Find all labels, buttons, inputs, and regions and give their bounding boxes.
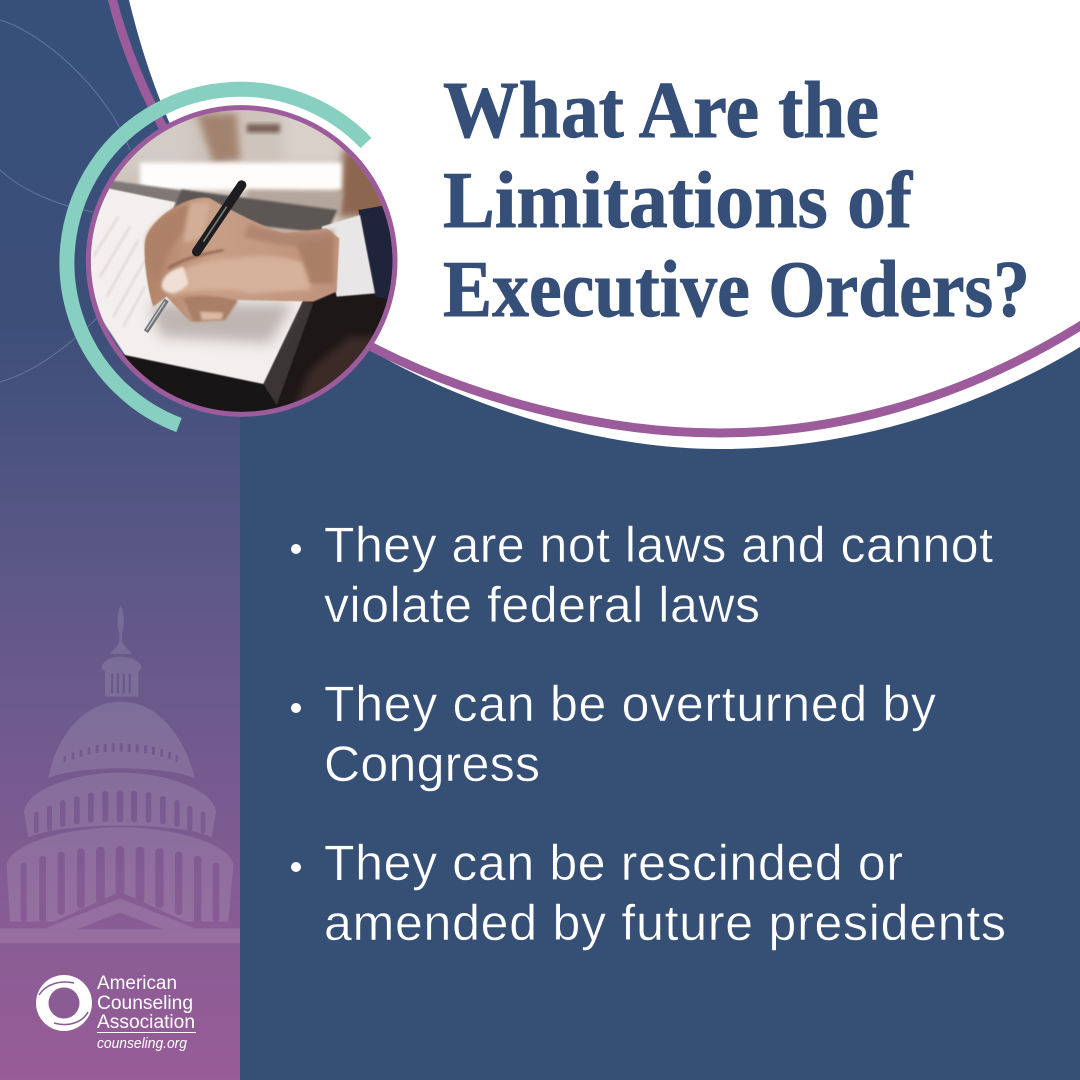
black folder base — [122, 354, 257, 412]
logo wordmark — [97, 973, 195, 1033]
capitol building watermark — [0, 590, 240, 960]
logo ring icon — [36, 975, 92, 1031]
bullet list — [291, 517, 1006, 951]
bullet 2: They can be overturned by — [324, 676, 936, 732]
logo url: counseling.org — [97, 1036, 187, 1052]
decorative thin arcs — [0, 20, 130, 382]
folder — [170, 189, 337, 233]
panel: left gradient column — [0, 0, 240, 1080]
photo blurred background — [90, 110, 386, 263]
logo: American Counseling Association — [36, 973, 196, 1052]
bullet 1: violate federal laws — [324, 577, 760, 633]
dark desk lower right — [265, 286, 390, 407]
logo wordmark: American — [97, 973, 177, 994]
title: Executive Orders? — [443, 246, 1030, 334]
bullet 1: They are not laws and cannot — [324, 517, 993, 573]
bullet 2 — [291, 676, 936, 792]
photo: hand signing document — [83, 103, 403, 423]
photo purple ring — [88, 108, 395, 414]
paper — [83, 188, 303, 384]
logo wordmark: Association — [97, 1012, 195, 1033]
logo wordmark: Counseling — [97, 993, 193, 1014]
title — [443, 67, 1030, 334]
title: Limitations of — [443, 157, 913, 245]
bullet 3: amended by future presidents — [324, 895, 1006, 951]
bullet 1 — [291, 517, 993, 633]
bullet 2: Congress — [324, 736, 540, 792]
title: What Are the — [443, 67, 879, 155]
bullet 3 — [291, 835, 1006, 951]
paper lines — [93, 217, 145, 327]
pen — [146, 185, 242, 332]
suit sleeve — [358, 206, 392, 298]
hand — [145, 198, 339, 322]
shirt cuff — [322, 215, 375, 297]
panel: white title shape — [129, 0, 1080, 449]
bullet 3: They can be rescinded or — [324, 835, 903, 891]
purple curved accent line — [112, 0, 1080, 433]
teal arc around photo — [67, 89, 366, 425]
